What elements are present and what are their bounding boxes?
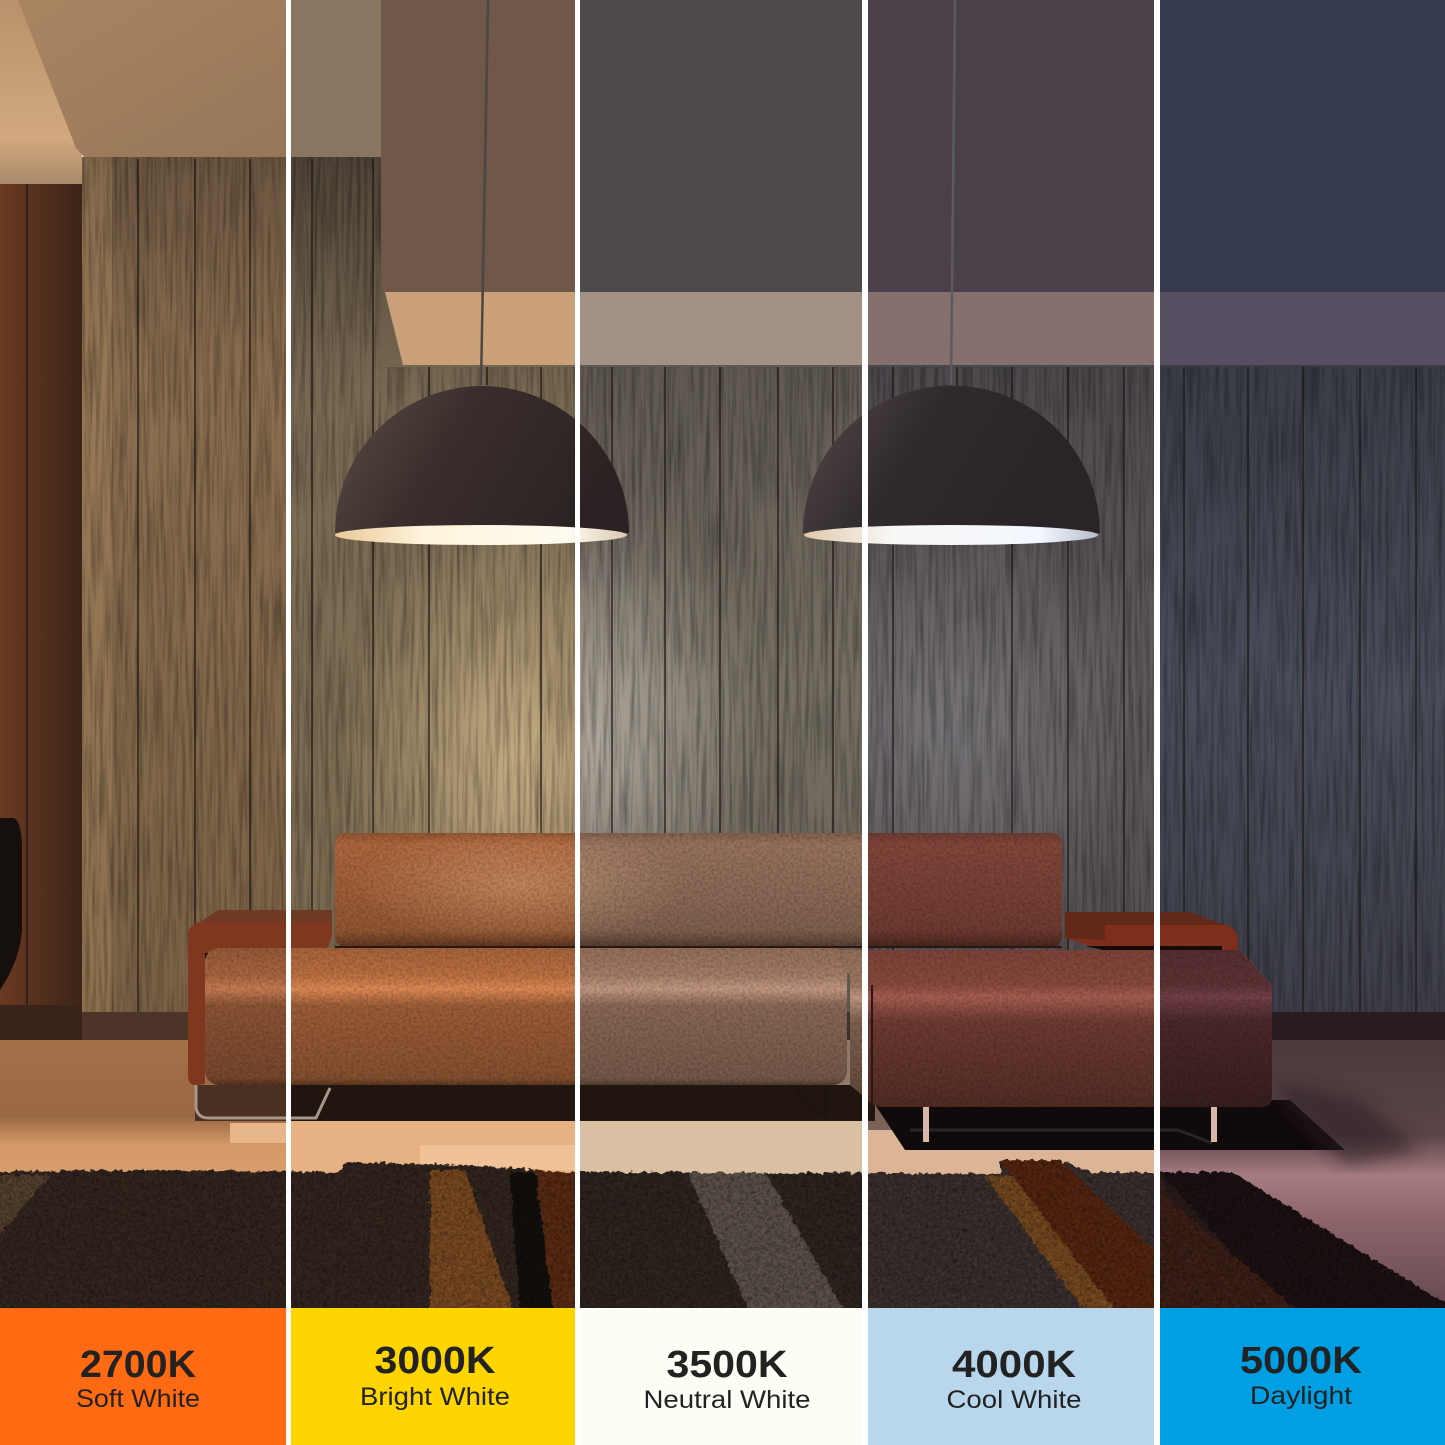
sofa: back cushion <box>335 833 1062 947</box>
label: 3500K Neutral White: Neutral White <box>644 1386 810 1414</box>
wood wall grain texture <box>82 157 1445 1012</box>
label: 4000K Cool White <box>868 1308 1154 1445</box>
label: 5000K Daylight: 5000K <box>1240 1340 1363 1382</box>
sofa: colour tint per column <box>205 833 1272 1107</box>
label: 3000K Bright White: Bright White <box>360 1383 510 1411</box>
rug: base colours per column <box>0 1168 286 1308</box>
pendant lamp: right <box>803 0 1100 545</box>
sofa: chaise seat <box>830 950 1272 1107</box>
label: 2700K Soft White <box>0 1308 286 1445</box>
rug: diagonal stripes <box>0 1173 51 1235</box>
wall plank lines <box>27 159 1416 1012</box>
label: 3000K Bright White: 3000K <box>374 1340 496 1382</box>
rug <box>0 1158 1445 1308</box>
panel: 3000K room section <box>291 0 575 1174</box>
label: 2700K Soft White: 2700K <box>80 1344 197 1386</box>
panel: 4000K room section <box>868 0 1154 1176</box>
pendant lamp: left <box>335 0 629 545</box>
panel: 2700K room section <box>0 0 292 1210</box>
label: 4000K Cool White: Cool White <box>946 1386 1082 1414</box>
label: 3500K Neutral White <box>580 1308 862 1445</box>
sofa: leather sheen and texture <box>190 825 1280 1110</box>
sofa: seam dark lines <box>335 947 1062 1107</box>
label: 2700K Soft White: Soft White <box>76 1385 200 1413</box>
sofa: main seat <box>205 948 847 1085</box>
white column dividers <box>286 0 1160 1445</box>
sofa: left armrest <box>188 910 335 1085</box>
label: 4000K Cool White: 4000K <box>952 1344 1077 1386</box>
label: 5000K Daylight: Daylight <box>1250 1382 1352 1410</box>
left chair edge <box>0 818 22 990</box>
label: 5000K Daylight <box>1160 1308 1445 1445</box>
sofa shadow on floor <box>286 1080 1420 1165</box>
rug: fuzzy texture <box>0 1158 1445 1308</box>
label: 3500K Neutral White: 3500K <box>666 1344 788 1386</box>
sofa <box>188 833 1272 1144</box>
sofa: legs <box>196 1085 1214 1143</box>
panel: 3500K room section <box>580 0 862 1176</box>
label: 3000K Bright White <box>291 1308 575 1445</box>
sofa: right armrest <box>1065 912 1238 968</box>
panel: 5000K room section <box>1160 0 1445 1310</box>
